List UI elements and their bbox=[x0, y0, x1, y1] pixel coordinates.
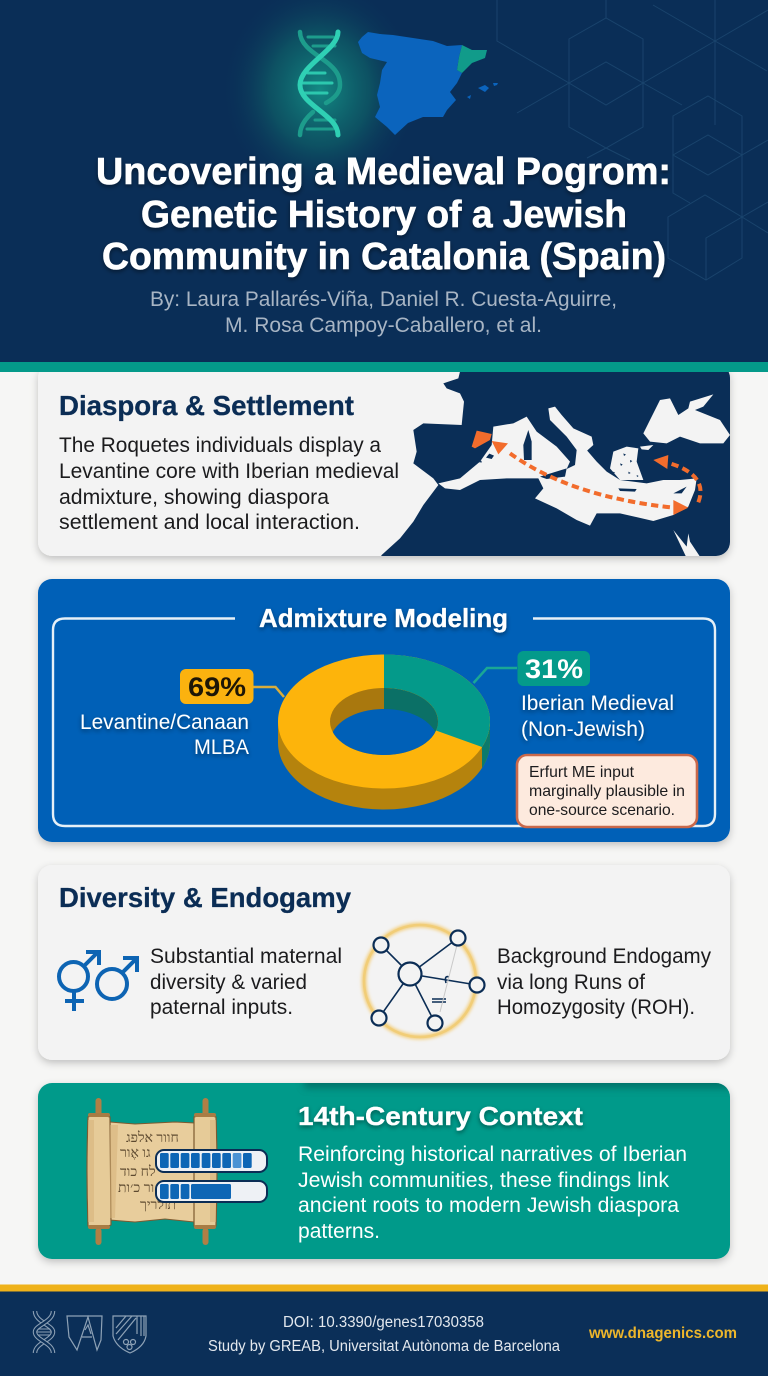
label: Levantine: Levantine/Canaan bbox=[80, 710, 249, 734]
text: endogamy bbox=[497, 944, 711, 1019]
scroll text: ור כ׳ות bbox=[118, 1181, 154, 1196]
callout: 31% bbox=[474, 651, 590, 686]
map of the Mediterranean bbox=[380, 365, 733, 558]
callout: 31%: 31% bbox=[525, 654, 583, 684]
body text: The Roquetes individuals display a bbox=[59, 433, 381, 457]
callout: Erfurt note: Erfurt ME input bbox=[529, 764, 635, 781]
text: endogamy: Homozygosity (ROH). bbox=[497, 995, 695, 1019]
citation text bbox=[208, 1314, 560, 1355]
label: Iberian bbox=[521, 691, 674, 741]
panel: teal divider bar bbox=[0, 362, 768, 372]
donut chart bbox=[278, 654, 490, 810]
callout: 69%: 69% bbox=[188, 672, 246, 702]
callout: Erfurt note: marginally plausible in bbox=[529, 783, 685, 800]
panel: Diversity & Endogamy bbox=[38, 865, 730, 1060]
callout: 69% bbox=[180, 669, 284, 704]
body text: patterns. bbox=[298, 1219, 380, 1243]
title bbox=[96, 151, 671, 278]
Catalonia highlight bbox=[472, 431, 492, 448]
label: Levantine bbox=[80, 710, 250, 759]
callout: Erfurt note bbox=[517, 755, 697, 827]
icon: gender symbols bbox=[59, 952, 137, 1011]
icon: DNA helix bbox=[300, 32, 340, 135]
hexagon background pattern bbox=[497, 0, 768, 280]
body text: admixture, showing diaspora bbox=[59, 485, 329, 509]
frame bbox=[53, 618, 715, 826]
authors bbox=[150, 288, 617, 337]
body text bbox=[298, 1142, 687, 1243]
title: Uncovering a Medieval Pogrom: bbox=[96, 151, 671, 193]
icon: footer university logo bbox=[67, 1316, 102, 1350]
scroll text: לח כוד bbox=[120, 1164, 156, 1180]
heading: Admixture Modeling bbox=[259, 603, 508, 633]
heading: Diversity & Endogamy bbox=[59, 882, 351, 913]
text: maternal diversity: Substantial maternal bbox=[150, 944, 342, 968]
panel: footer bbox=[0, 1284, 768, 1376]
icon: scroll bbox=[87, 1098, 217, 1245]
citation text: DOI: 10.3390/genes17030358 bbox=[283, 1314, 484, 1331]
text: maternal diversity: diversity & varied bbox=[150, 970, 307, 994]
title: Community in Catalonia (Spain) bbox=[102, 236, 666, 278]
scroll text bbox=[118, 1130, 179, 1213]
icon: ROH network bbox=[364, 925, 484, 1037]
label: Levantine: MLBA bbox=[194, 735, 250, 759]
scroll text: חוור אלפג bbox=[126, 1130, 179, 1146]
scroll text: גו אֶור bbox=[120, 1146, 151, 1161]
migration arrows bbox=[510, 453, 701, 508]
authors: By: Laura Pallarés-Viña, Daniel R. Cuesta-Aguirre, bbox=[150, 288, 617, 311]
body text: Jewish communities, these findings link bbox=[298, 1168, 669, 1192]
dna glow bbox=[220, 0, 420, 202]
callout: Erfurt note: one-source scenario. bbox=[529, 802, 675, 819]
website link: www.dnagenics.com bbox=[588, 1325, 737, 1342]
body text: Levantine core with Iberian medieval bbox=[59, 459, 399, 483]
panel: header bbox=[0, 0, 768, 363]
label: Iberian: Iberian Medieval bbox=[521, 691, 674, 715]
label: Iberian: (Non-Jewish) bbox=[521, 717, 645, 741]
heading: 14th-Century Context bbox=[298, 1101, 583, 1131]
text: maternal diversity bbox=[150, 944, 342, 1019]
heading: Diaspora & Settlement bbox=[59, 390, 354, 421]
body text: Reinforcing historical narratives of Iberian bbox=[298, 1142, 687, 1166]
panel: Admixture Modeling bbox=[38, 579, 730, 842]
text: endogamy: Background Endogamy bbox=[497, 944, 711, 968]
icon: map of Spain bbox=[358, 32, 498, 135]
body text: settlement and local interaction. bbox=[59, 510, 360, 534]
panel: 14th-Century Context bbox=[38, 1076, 750, 1259]
icon: progress bars bbox=[156, 1150, 267, 1202]
body text bbox=[59, 433, 399, 534]
icon: footer DNA logo bbox=[35, 1311, 53, 1353]
authors: M. Rosa Campoy-Caballero, et al. bbox=[225, 314, 542, 337]
scroll text: תולריך bbox=[140, 1197, 176, 1213]
title: Genetic History of a Jewish bbox=[141, 194, 627, 236]
text: maternal diversity: paternal inputs. bbox=[150, 995, 293, 1019]
citation text: Study by GREAB, Universitat Autònoma de Barcelona bbox=[208, 1338, 560, 1355]
icon: footer shield logo bbox=[113, 1316, 146, 1353]
text: endogamy: via long Runs of bbox=[497, 970, 645, 994]
panel: Diaspora & Settlement bbox=[38, 364, 733, 558]
body text: ancient roots to modern Jewish diaspora bbox=[298, 1193, 679, 1217]
